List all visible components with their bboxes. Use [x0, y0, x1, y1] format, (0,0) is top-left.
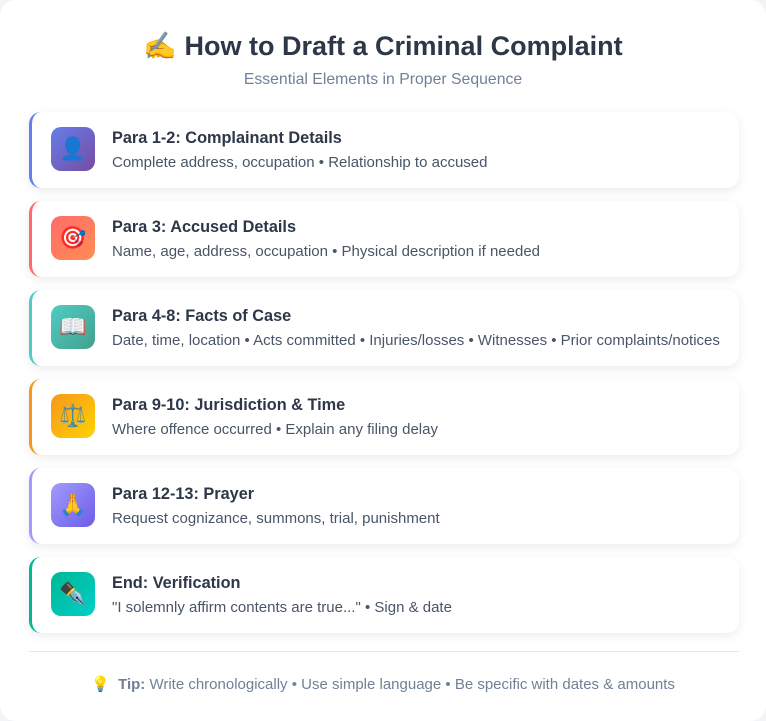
icon: praying hands: [51, 483, 95, 527]
icon: book: [51, 305, 95, 349]
icon: book: 📖: [59, 314, 87, 340]
heading: Para 3: Accused Details: [112, 218, 296, 236]
panel: accused: [29, 201, 739, 277]
icon: pen: ✒️: [59, 582, 87, 606]
heading: Para 1-2: Complainant Details: [112, 129, 342, 147]
icon: target: 🎯: [59, 226, 87, 250]
text: Date, time, location • Acts committed • Injuries/losses • Witnesses • Prior complaints/notices: [112, 332, 720, 349]
icon: pen: [51, 572, 95, 616]
heading: End: Verification: [112, 574, 240, 592]
icon: target: [51, 216, 95, 260]
text: Request cognizance, summons, trial, punishment: [112, 510, 440, 527]
title: ✍️ How to Draft a Criminal Complaint: [143, 31, 623, 61]
panel: verification: [29, 557, 739, 633]
text: "I solemnly affirm contents are true..." • Sign & date: [112, 599, 452, 616]
heading: Para 9-10: Jurisdiction & Time: [112, 396, 345, 414]
icon: person: 👤: [59, 136, 87, 162]
icon: scales: ⚖️: [59, 404, 87, 428]
heading: Para 12-13: Prayer: [112, 485, 254, 503]
text: Where offence occurred • Explain any filing delay: [112, 421, 438, 438]
text: Complete address, occupation • Relationship to accused: [112, 154, 487, 171]
tip: 💡 Tip: Write chronologically • Use simple language • Be specific with dates & amounts: [91, 676, 675, 693]
panel: facts: [29, 290, 739, 366]
text: Name, age, address, occupation • Physical description if needed: [112, 243, 540, 260]
heading: Para 4-8: Facts of Case: [112, 307, 291, 325]
subtitle: Essential Elements in Proper Sequence: [244, 71, 522, 88]
icon: person: [51, 127, 95, 171]
panel: prayer: [29, 468, 739, 544]
icon: praying hands: 🙏: [59, 492, 87, 518]
icon: scales: [51, 394, 95, 438]
panel: complainant: [29, 112, 739, 188]
panel: jurisdiction: [29, 379, 739, 455]
